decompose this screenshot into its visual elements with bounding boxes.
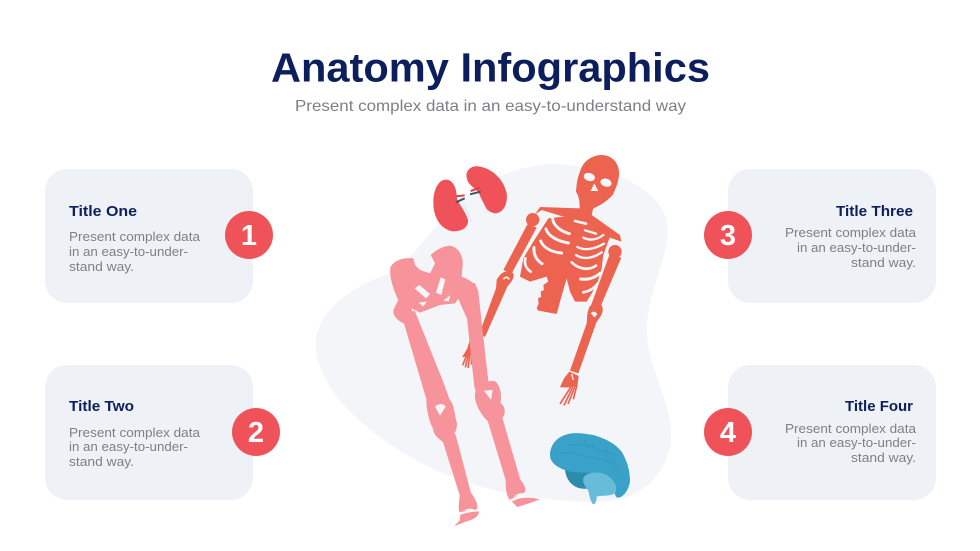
panel: title one: Title One [69, 203, 137, 220]
panel: title two: 2 [248, 417, 264, 449]
lower skeleton: pelvis and legs [390, 246, 539, 525]
skull [576, 155, 619, 211]
upper skeleton [479, 155, 622, 337]
title: Anatomy Infographics [271, 44, 710, 90]
right forearm and hand [560, 303, 603, 405]
background blob [316, 164, 671, 502]
pelvis [390, 246, 478, 323]
panel: title one: stand way. [69, 260, 134, 274]
panel: title two: in an easy-to-under- [69, 440, 188, 454]
left hand under legs [462, 337, 480, 368]
left arm [479, 213, 539, 337]
panel: title three: 3 [720, 220, 736, 252]
right leg [458, 284, 539, 507]
icon: brain [550, 433, 630, 504]
icon: kidneys [433, 166, 507, 231]
panel: title two: stand way. [69, 455, 134, 469]
panel: title one [45, 169, 273, 303]
panel: title four: stand way. [851, 451, 916, 465]
panel: title three: Present complex data [785, 226, 916, 240]
panel: title three [704, 169, 936, 303]
subtitle: Present complex data in an easy-to-understand way [295, 98, 686, 115]
panel: title two [45, 365, 280, 500]
panel: title four [704, 365, 936, 500]
right upper arm [590, 245, 622, 312]
panel: title four: Present complex data [785, 422, 916, 436]
panel: title four: in an easy-to-under- [797, 436, 916, 450]
panel: title four: Title Four [845, 398, 913, 415]
panel: title four: 4 [720, 417, 736, 449]
panel: title three: in an easy-to-under- [797, 241, 916, 255]
ribcage [520, 207, 621, 314]
left leg [404, 312, 479, 525]
panel: title one: 1 [241, 220, 257, 252]
panel: title two: Present complex data [69, 426, 200, 440]
panel: title three: Title Three [836, 203, 913, 220]
panel: title two: Title Two [69, 398, 134, 415]
panel: title one: in an easy-to-under- [69, 245, 188, 259]
panel: title three: stand way. [851, 256, 916, 270]
panel: title one: Present complex data [69, 230, 200, 244]
